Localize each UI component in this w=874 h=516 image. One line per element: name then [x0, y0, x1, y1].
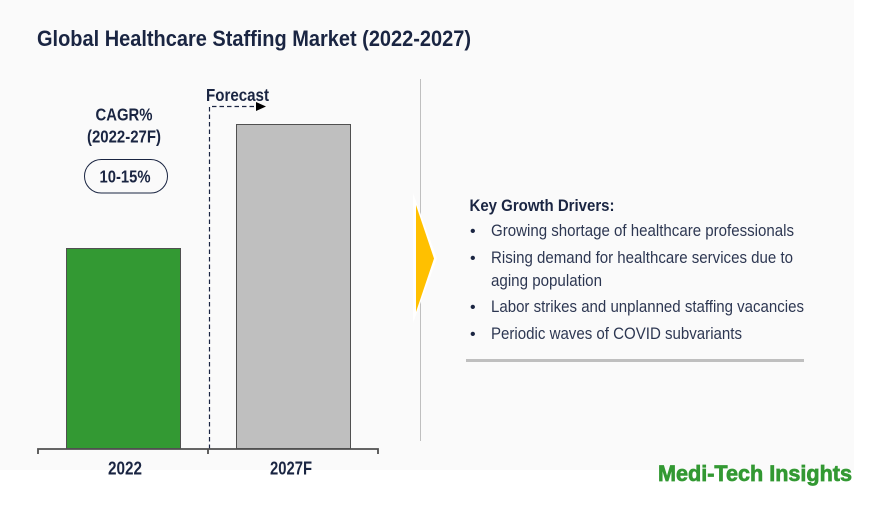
- CAGR label: [87, 104, 161, 146]
- driver 3: Labor strikes and unplanned staffing vacancies: [491, 297, 804, 316]
- title: Global Healthcare Staffing Market (2022-2027): [37, 26, 471, 51]
- axis label: 2027F: 2027F: [270, 458, 312, 478]
- driver 3: •: [470, 299, 476, 316]
- bar chart: [38, 102, 378, 478]
- vertical divider: [420, 79, 422, 441]
- driver 1: •: [470, 223, 476, 240]
- driver 2: [470, 248, 793, 290]
- drivers underline: [466, 359, 804, 362]
- CAGR pill: 10-15%: [100, 166, 151, 186]
- driver 2: Rising demand for healthcare services due to: [491, 248, 793, 267]
- CAGR label: (2022-27F): [87, 126, 161, 146]
- CAGR pill: [84, 160, 168, 193]
- forecast label: Forecast: [206, 85, 269, 105]
- forecast divider arrow: [210, 102, 266, 449]
- CAGR label: CAGR%: [96, 104, 153, 124]
- driver 4: Periodic waves of COVID subvariants: [491, 324, 742, 343]
- bar: 2022: [66, 248, 180, 448]
- logo: Medi-Tech Insights: Medi-Tech Insights: [658, 461, 852, 486]
- heading: key growth drivers: Key Growth Drivers:: [470, 196, 614, 215]
- driver 2: aging population: [491, 271, 602, 290]
- x axis: [38, 449, 378, 454]
- driver 2: •: [470, 250, 476, 267]
- driver 4: •: [470, 326, 476, 343]
- driver 1: Growing shortage of healthcare professionals: [491, 221, 794, 240]
- axis label: 2022: 2022: [108, 458, 142, 478]
- icon: yellow chevron arrow: [413, 193, 437, 323]
- key growth drivers text: [470, 196, 804, 343]
- bar: 2027F: [236, 124, 350, 448]
